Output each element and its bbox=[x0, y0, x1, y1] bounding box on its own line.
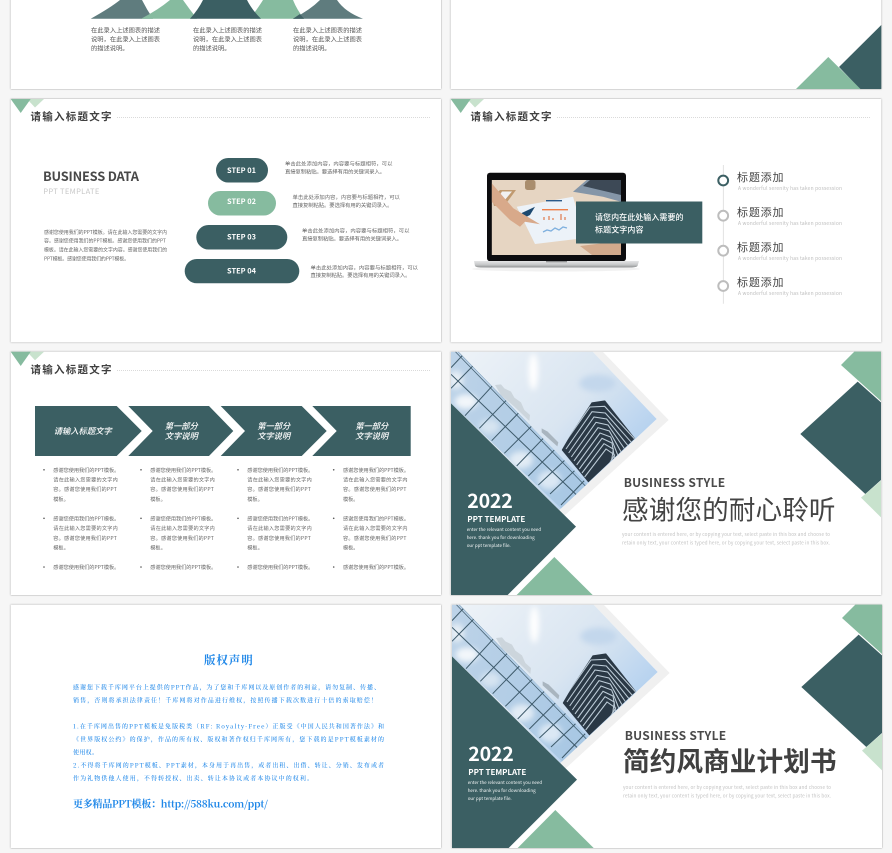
bullet list column 2: 模板。 bbox=[150, 495, 166, 503]
bullet list column 2: 模板。 bbox=[150, 543, 166, 551]
panel: thank you slide bbox=[449, 352, 881, 595]
bullet list column 3: 请在此输入您需要的文字内 bbox=[247, 524, 312, 532]
bullet list column 1 bbox=[43, 466, 119, 571]
text: description: your content is entered here, or by copying your text, select paste in this box and choose to bbox=[623, 784, 831, 791]
bullet list column 4: 容。感谢您使用我们的PPT bbox=[343, 485, 406, 493]
timeline item 4 bbox=[718, 274, 842, 297]
chevron 3 bbox=[221, 406, 327, 456]
heading: thank you: 感谢您的耐心聆听 bbox=[622, 488, 836, 528]
step 02 bbox=[208, 191, 276, 216]
text: year and template label bbox=[468, 738, 542, 802]
graphic: city photo and geometric shapes bbox=[450, 605, 882, 848]
icon: header triangles bbox=[11, 99, 44, 113]
text: description bbox=[622, 531, 830, 546]
bullet list column 4: 感谢您使用我们的PPT模板。 bbox=[343, 466, 409, 474]
bullet list column 3 bbox=[237, 466, 313, 571]
bullet list column 3: 感谢您使用我们的PPT模板。 bbox=[247, 514, 313, 522]
text: year and template label: PPT TEMPLATE bbox=[467, 514, 525, 525]
timeline item 1: 标题添加 bbox=[737, 169, 784, 185]
heading: business style: BUSINESS STYLE bbox=[624, 474, 725, 491]
image: laptop bbox=[472, 173, 640, 272]
text: column three description: 说明，在此录入上述图表 bbox=[293, 34, 363, 44]
text: more templates link: 更多精品PPT模板：http://588ku.com/ppt/ bbox=[73, 796, 268, 810]
chevron 2 bbox=[128, 406, 233, 456]
step 02: STEP 02 bbox=[227, 196, 256, 207]
text: column two description: 的描述说明。 bbox=[193, 44, 230, 52]
text: copyright terms: 1.在千库网出售的PPT模板是免版税类（RF: Royalty-Free）正版受《中国人民共和国著作法》和 bbox=[73, 722, 384, 730]
panel: laptop and timeline bbox=[451, 99, 881, 342]
panel: copyright notice bbox=[11, 605, 441, 848]
chevron 1 bbox=[35, 406, 142, 456]
timeline item 1: A wonderful serenity has taken possession bbox=[738, 185, 842, 192]
heading: slide title: 请输入标题文字 bbox=[30, 109, 112, 124]
bullet list column 1: 容。感谢您使用我们的PPT bbox=[53, 534, 117, 542]
text: year and template label: 2022 bbox=[468, 738, 514, 767]
text: year and template label: our ppt template file. bbox=[467, 542, 511, 549]
step 01 description: 直接复制粘贴。要选择有用的关键词录入。 bbox=[285, 168, 385, 176]
step 03 bbox=[196, 225, 287, 250]
bullet list column 2: 请在此输入您需要的文字内 bbox=[150, 475, 215, 483]
text: column one description: 在此录入上述图表的描述 bbox=[91, 26, 161, 34]
bullet list column 4: 请在此输入您需要的文字内 bbox=[343, 475, 408, 483]
text: left paragraph: PPT模板。感谢您使用我们的PPT模板。 bbox=[44, 255, 129, 262]
bullet list column 3: 感谢您使用我们的PPT模板。 bbox=[247, 563, 313, 571]
bullet list column 1: 感谢您使用我们的PPT模板。 bbox=[53, 563, 119, 571]
text: copyright intro: 感谢您下载千库网平台上提供的PPT作品，为了您和千库网以及原创作者的利益，请勿复制、传播、 bbox=[73, 682, 380, 692]
panel: business data steps bbox=[11, 99, 441, 342]
text: left paragraph bbox=[44, 229, 167, 262]
text: column two description: 说明，在此录入上述图表 bbox=[193, 34, 263, 44]
timeline item 3: 标题添加 bbox=[737, 239, 784, 255]
text: year and template label bbox=[467, 485, 541, 549]
bullet list column 2: 感谢您使用我们的PPT模板。 bbox=[150, 466, 216, 474]
bullet list column 2: 感谢您使用我们的PPT模板。 bbox=[150, 514, 216, 522]
bullet list column 4 bbox=[333, 466, 409, 571]
text: column three description: 在此录入上述图表的描述 bbox=[293, 26, 363, 34]
bullet list column 3: 模板。 bbox=[247, 495, 263, 503]
text: copyright terms: 2.不得将千库网的PPT模板、PPT素材，本身用于再出售，或者出租、出借、转让、分销、发布或者 bbox=[73, 760, 384, 770]
bullet list column 4: 模板。 bbox=[343, 495, 358, 503]
step 02 description bbox=[292, 193, 401, 209]
text: year and template label: 2022 bbox=[467, 485, 513, 514]
bullet list column 4: 容。感谢您使用我们的PPT bbox=[343, 534, 406, 542]
text: year and template label: enter the relevant content you need bbox=[467, 526, 541, 533]
chevron 1: 请输入标题文字 bbox=[54, 425, 113, 437]
timeline item 2: A wonderful serenity has taken possession bbox=[738, 220, 842, 227]
callout: teal text box: 请您内在此处输入需要的 bbox=[595, 212, 684, 223]
timeline item 4: 标题添加 bbox=[737, 274, 784, 290]
callout: teal text box: 标题文字内容 bbox=[595, 225, 644, 236]
chevron 2: 文字说明 bbox=[165, 430, 199, 442]
step 04 description bbox=[310, 263, 419, 279]
text: year and template label: here. thank you for downloading bbox=[468, 787, 536, 794]
heading: slide title: 请输入标题文字 bbox=[470, 109, 552, 124]
step 01 description bbox=[285, 160, 393, 176]
text: year and template label: PPT TEMPLATE bbox=[468, 767, 526, 778]
bullet list column 2: 容。感谢您使用我们的PPT bbox=[150, 485, 214, 493]
step 03: STEP 03 bbox=[227, 232, 256, 243]
step 04 bbox=[185, 259, 299, 283]
step 03 description: 单击此处添加内容，内容要与标题相符，可以 bbox=[302, 227, 410, 235]
bullet list column 3: 感谢您使用我们的PPT模板。 bbox=[247, 466, 313, 474]
icon: corner triangles bbox=[796, 25, 881, 89]
panel: partial slide top left bbox=[11, 0, 441, 89]
bullet list column 1: 感谢您使用我们的PPT模板。 bbox=[53, 514, 119, 522]
text: copyright terms: 《世界版权公约》的保护，作品的所有权、版权和著作权归千库网所有，您下载的是PPT模板素材的 bbox=[73, 734, 384, 744]
heading: main title: 简约风商业计划书 bbox=[623, 740, 836, 779]
bullet list column 2: 感谢您使用我们的PPT模板。 bbox=[150, 563, 216, 571]
chevron 4 bbox=[312, 406, 411, 456]
heading: business style: BUSINESS STYLE bbox=[625, 727, 726, 744]
bullet list column 3: 请在此输入您需要的文字内 bbox=[247, 475, 312, 483]
timeline item 2: 标题添加 bbox=[737, 204, 784, 220]
text: description bbox=[623, 784, 831, 799]
chart: overlapping mountains bbox=[91, 0, 363, 19]
text: copyright intro bbox=[73, 682, 380, 706]
bullet list column 4: 请在此输入您需要的文字内 bbox=[343, 524, 408, 532]
text: description: retain only text, your content is typed here, or by copying your text, select paste in this box. bbox=[623, 792, 831, 799]
bullet list column 1: 容。感谢您使用我们的PPT bbox=[53, 485, 117, 493]
bullet list column 2 bbox=[140, 466, 216, 571]
text: description: retain only text, your content is typed here, or by copying your text, select paste in this box. bbox=[622, 539, 830, 546]
timeline item 1 bbox=[718, 169, 842, 192]
bullet list column 3: 模板。 bbox=[247, 543, 263, 551]
text: description: your content is entered here, or by copying your text, select paste in this box and choose to bbox=[622, 531, 830, 538]
timeline bbox=[718, 165, 842, 304]
bullet list column 3: 容。感谢您使用我们的PPT bbox=[247, 534, 311, 542]
text: ppt template subtitle: PPT TEMPLATE bbox=[43, 186, 100, 197]
panel: partial slide top right bbox=[451, 0, 881, 89]
step 03 description bbox=[302, 227, 410, 242]
text: column one description bbox=[91, 26, 161, 52]
step 02 description: 单击此处添加内容，内容要与标题相符，可以 bbox=[292, 193, 401, 201]
step 02 description: 直接复制粘贴。要选择有用的关键词录入。 bbox=[292, 201, 392, 209]
text: left paragraph: 模板。请在此输入您需要的文字内容。感谢您使用我们的 bbox=[44, 247, 167, 254]
bullet list column 2: 容。感谢您使用我们的PPT bbox=[150, 534, 214, 542]
panel: chevron process bbox=[11, 352, 441, 595]
step 04: STEP 04 bbox=[227, 266, 257, 277]
text: column two description bbox=[193, 26, 263, 52]
callout: teal text box bbox=[576, 202, 702, 244]
chevron 2: 第一部分 bbox=[165, 420, 198, 432]
step 01: STEP 01 bbox=[227, 165, 256, 176]
timeline item 4: A wonderful serenity has taken possession bbox=[738, 290, 842, 297]
step 01 bbox=[216, 158, 268, 182]
text: copyright terms: 作为礼物供他人使用，不得转授权、出卖、转让本协议或者本协议中的权利。 bbox=[73, 774, 313, 784]
text: column one description: 说明，在此录入上述图表 bbox=[91, 34, 161, 44]
heading: business data: BUSINESS DATA bbox=[43, 166, 140, 185]
step 01 description: 单击此处添加内容，内容要与标题相符，可以 bbox=[285, 160, 393, 168]
timeline item 3 bbox=[718, 239, 842, 262]
bullet list column 4: 模板。 bbox=[343, 543, 358, 551]
bullet list column 1: 模板。 bbox=[53, 543, 69, 551]
text: column three description bbox=[293, 26, 363, 52]
text: left paragraph: 感谢您使用我们的PPT模板。请在此输入您需要的文字内 bbox=[44, 229, 167, 236]
step 04 description: 直接复制粘贴。要选择有用的关键词录入。 bbox=[310, 271, 410, 279]
text: copyright terms: 使用权。 bbox=[73, 748, 98, 756]
timeline item 3: A wonderful serenity has taken possession bbox=[738, 255, 842, 262]
chevron 4: 文字说明 bbox=[355, 430, 390, 442]
chevron 3: 第一部分 bbox=[257, 420, 291, 432]
text: left paragraph: 容。感谢您使用我们的PPT模板。感谢您使用我们的PPT bbox=[44, 238, 166, 245]
bullet list column 1: 请在此输入您需要的文字内 bbox=[53, 524, 118, 532]
panel: cover slide bbox=[450, 605, 882, 848]
text: copyright intro: 销售，否则将承担法律责任！千库网将对作品进行维权，按照传播下载次数进行十倍的索取赔偿！ bbox=[73, 696, 377, 706]
bullet list column 2: 请在此输入您需要的文字内 bbox=[150, 524, 215, 532]
bullet list column 4: 感谢您使用我们的PPT模板。 bbox=[343, 563, 409, 571]
step 03 description: 直接复制粘贴。要选择有用的关键词录入。 bbox=[302, 234, 402, 242]
heading: slide title: 请输入标题文字 bbox=[30, 362, 112, 377]
text: year and template label: here. thank you for downloading bbox=[467, 534, 535, 541]
timeline item 2 bbox=[718, 204, 842, 227]
bullet list column 1: 请在此输入您需要的文字内 bbox=[53, 475, 118, 483]
icon: header triangles bbox=[11, 352, 44, 366]
chevron 4: 第一部分 bbox=[355, 420, 389, 432]
text: column three description: 的描述说明。 bbox=[293, 44, 330, 52]
text: column one description: 的描述说明。 bbox=[91, 44, 128, 52]
text: year and template label: enter the relevant content you need bbox=[468, 779, 542, 786]
bullet list column 3: 容。感谢您使用我们的PPT bbox=[247, 485, 311, 493]
bullet list column 1: 感谢您使用我们的PPT模板。 bbox=[53, 466, 119, 474]
text: copyright terms bbox=[73, 722, 384, 784]
step 04 description: 单击此处添加内容，内容要与标题相符，可以 bbox=[310, 263, 419, 271]
heading: copyright: 版权声明 bbox=[204, 652, 253, 668]
bullet list column 1: 模板。 bbox=[53, 495, 69, 503]
icon: header triangles bbox=[451, 99, 484, 113]
text: year and template label: our ppt template file. bbox=[468, 795, 512, 802]
bullet list column 4: 感谢您使用我们的PPT模板。 bbox=[343, 514, 409, 522]
text: column two description: 在此录入上述图表的描述 bbox=[193, 26, 263, 34]
chevron 3: 文字说明 bbox=[257, 430, 292, 442]
graphic: city photo and geometric shapes bbox=[449, 352, 881, 595]
